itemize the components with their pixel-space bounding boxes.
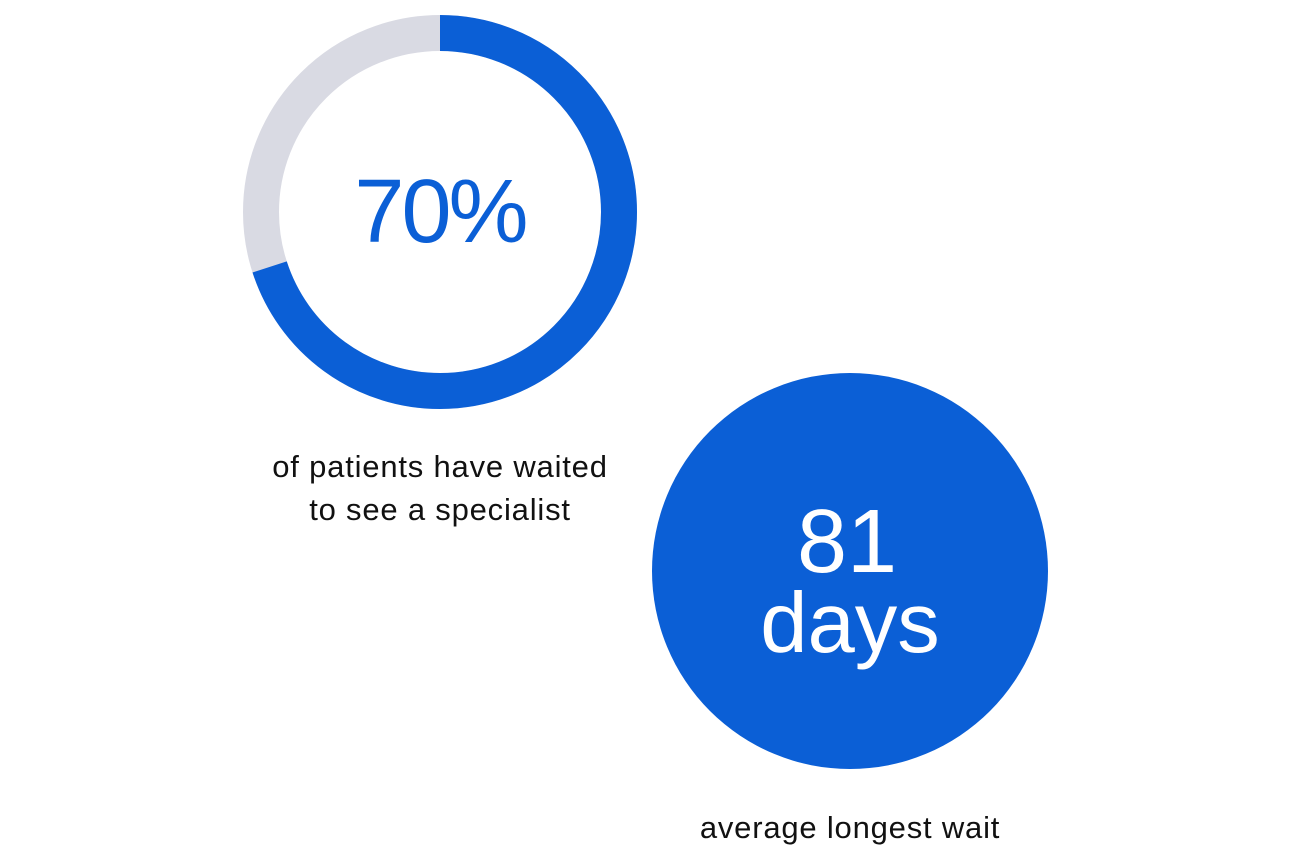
caption: patients waited: to see a specialist bbox=[309, 492, 571, 527]
donut chart: 70% bbox=[261, 33, 619, 391]
circle stat: 81 days: 81 bbox=[797, 492, 897, 592]
circle stat: 81 days: days bbox=[760, 576, 940, 671]
circle stat: 81 days bbox=[652, 373, 1048, 769]
caption: patients waited bbox=[272, 449, 608, 527]
caption: patients waited: of patients have waited bbox=[272, 449, 608, 484]
caption: average longest wait: average longest wait bbox=[700, 810, 1000, 845]
donut value label: 70% bbox=[354, 162, 526, 262]
